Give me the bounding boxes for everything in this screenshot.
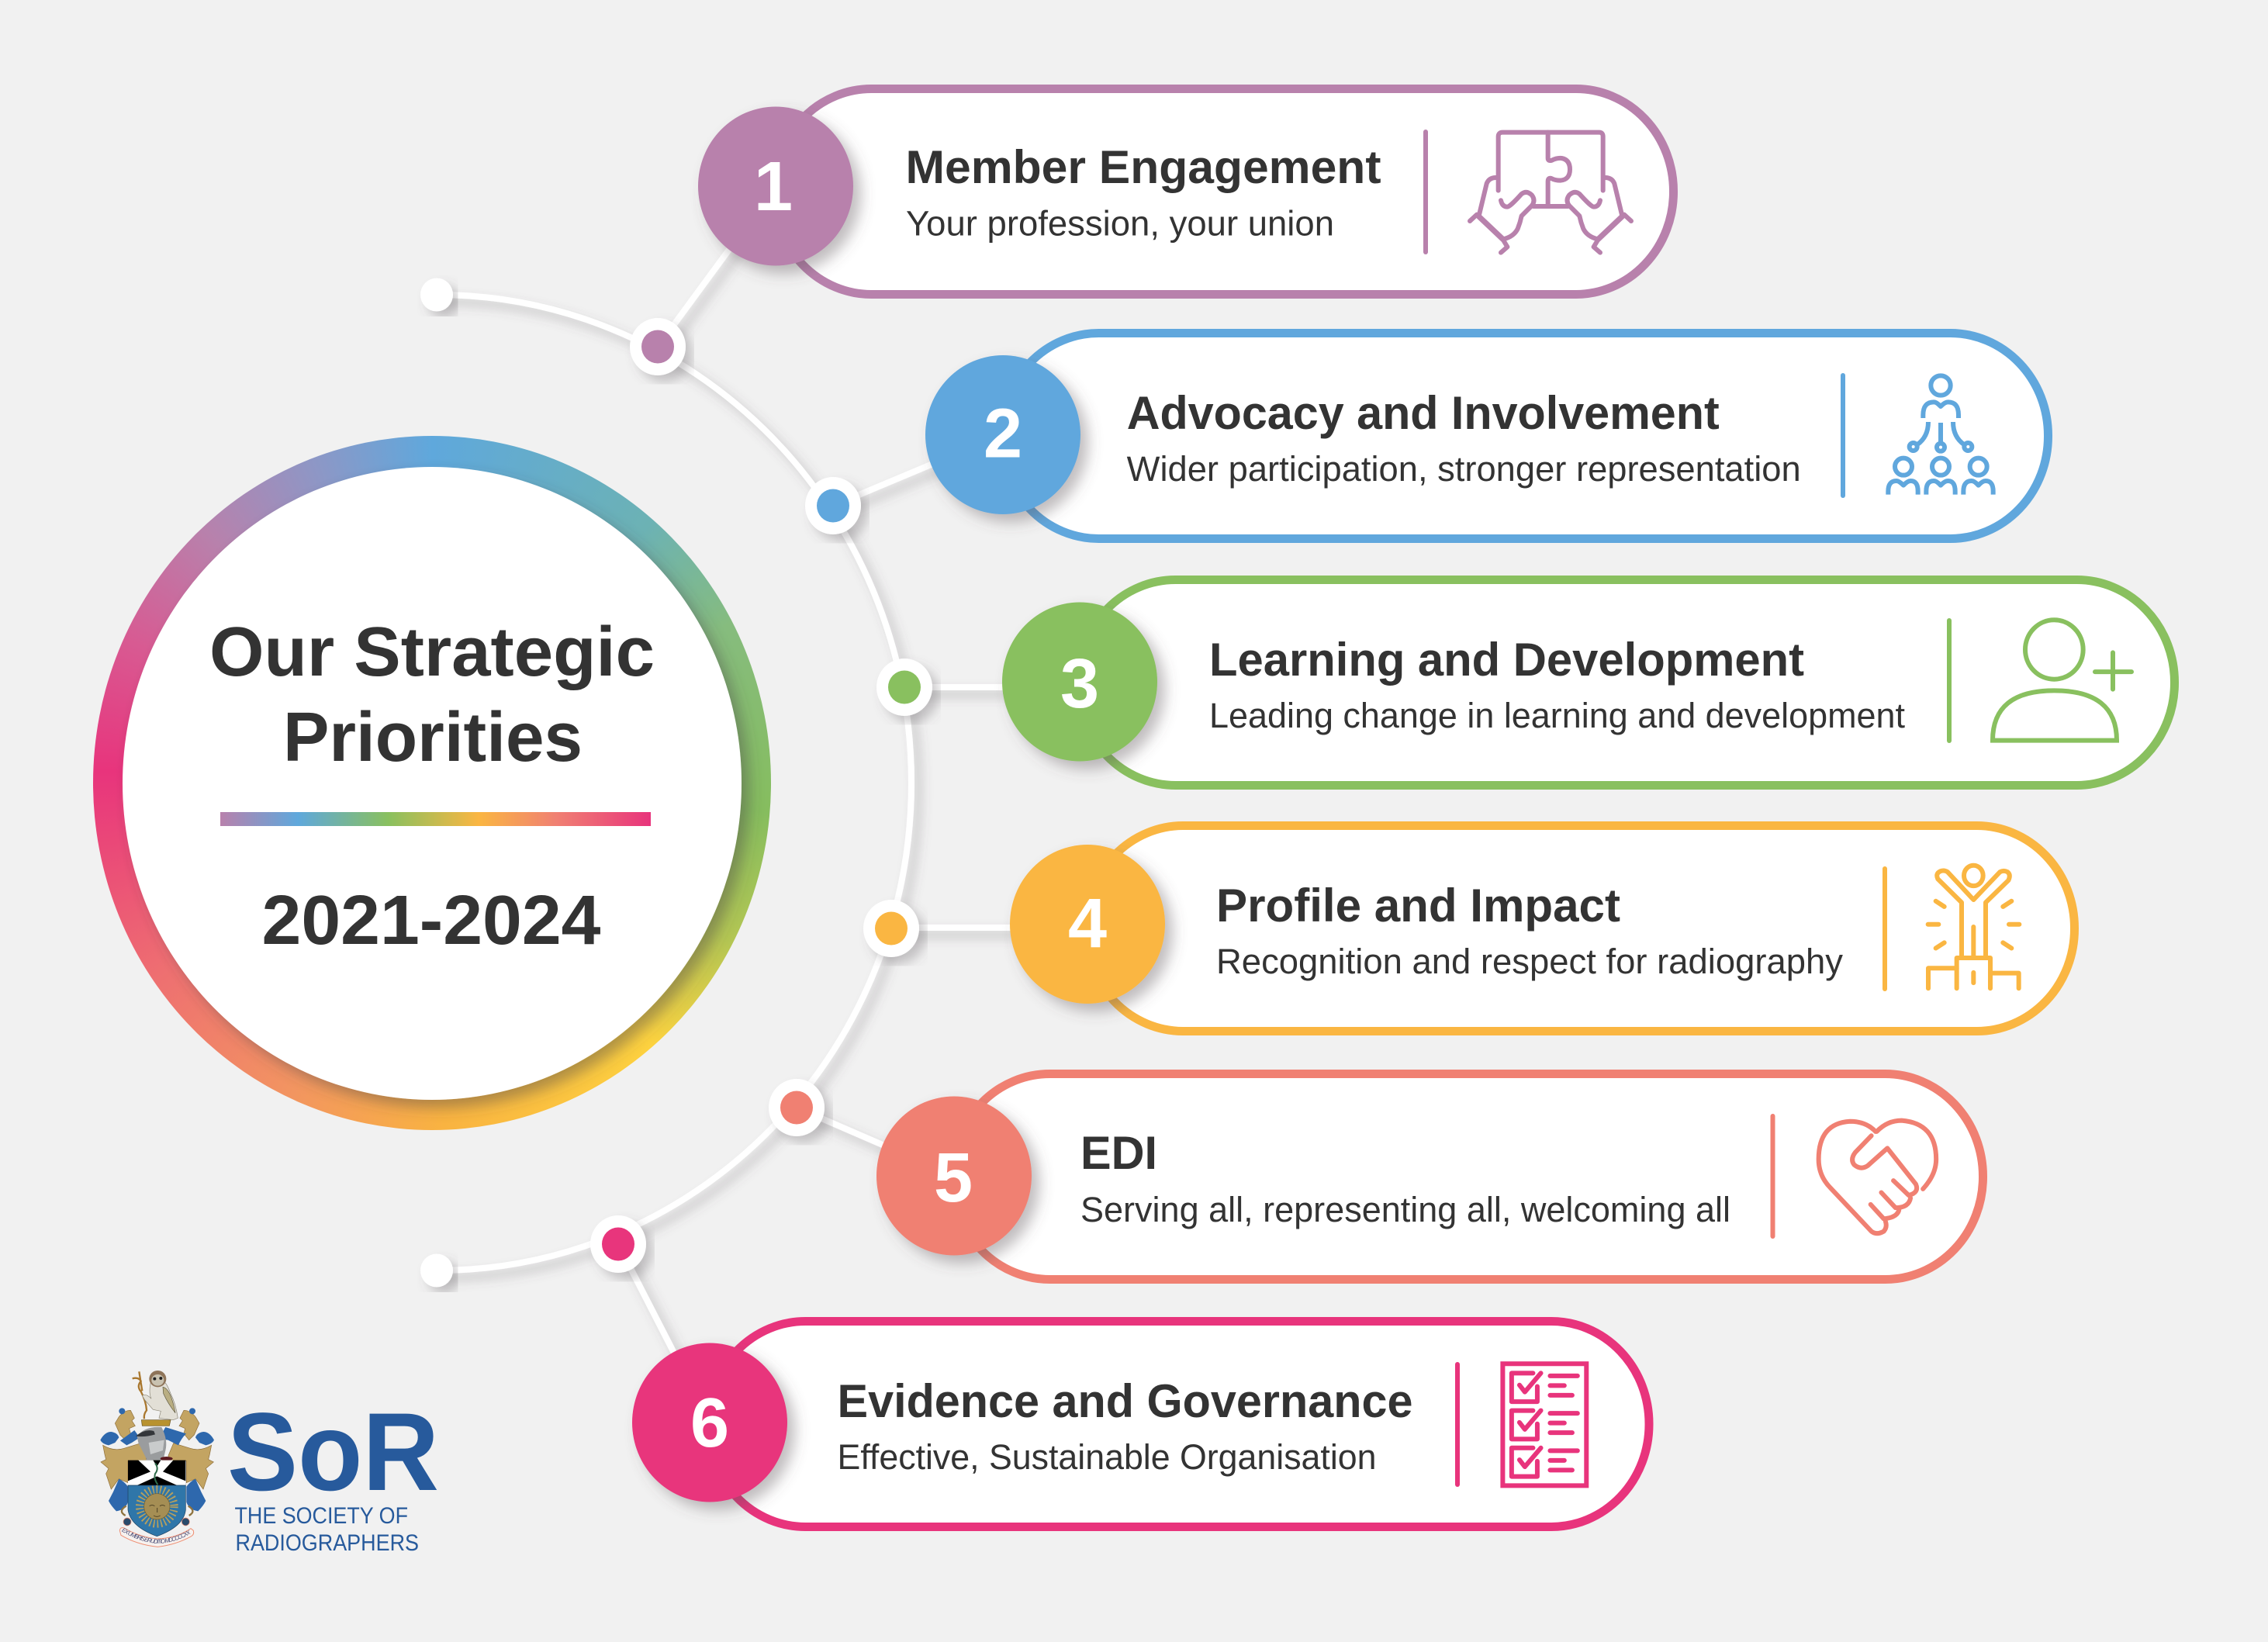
number badge 5: 5 xyxy=(934,1139,973,1217)
subtitle: Effective, Sustainable Organisation xyxy=(838,1437,1376,1477)
staff and serpent xyxy=(133,1371,147,1419)
subtitle: Leading change in learning and development xyxy=(1209,696,1905,735)
blue wreath leaf xyxy=(159,1427,186,1445)
title: Advocacy and Involvement xyxy=(1127,387,1720,439)
subtitle: Your profession, your union xyxy=(906,203,1334,244)
society name: THE SOCIETY OF xyxy=(234,1503,408,1529)
rainbow divider xyxy=(220,812,651,826)
title: Member Engagement xyxy=(906,141,1381,193)
number badge 1: 1 xyxy=(754,148,793,226)
node 2 xyxy=(805,477,861,534)
number badge 1 xyxy=(698,107,853,265)
panel: priority 1 Member Engagement xyxy=(698,88,1674,295)
panel: priority 5 EDI xyxy=(876,1073,1983,1280)
number badge 3: 3 xyxy=(1060,645,1099,723)
timeline end dot xyxy=(420,1253,453,1288)
timeline start dot xyxy=(420,278,453,312)
icon: group hierarchy xyxy=(1888,375,1993,495)
heading xyxy=(209,614,655,776)
society name: RADIOGRAPHERS xyxy=(236,1530,419,1556)
node 5 xyxy=(769,1079,825,1136)
number badge 4 xyxy=(1010,845,1165,1004)
node 4 xyxy=(863,900,919,957)
shield base with sun xyxy=(128,1485,185,1537)
motto scroll: EX UMBRIS ERUDITIO MDCCCCXX xyxy=(121,1528,191,1543)
heading: Priorities xyxy=(283,699,583,776)
subtitle: Serving all, representing all, welcoming all xyxy=(1080,1190,1730,1229)
pill outline xyxy=(707,1322,1649,1526)
divider xyxy=(1423,130,1428,254)
icon: person on podium xyxy=(1928,866,2019,988)
title: EDI xyxy=(1080,1127,1157,1179)
panel: priority 2 Advocacy and Involvement xyxy=(925,334,2048,538)
subtitle: Recognition and respect for radiography xyxy=(1216,942,1843,981)
left mantling xyxy=(100,1408,146,1516)
icon: handshake heart xyxy=(1819,1121,1936,1233)
gradient ring xyxy=(93,436,771,1130)
owl xyxy=(142,1371,178,1420)
pill outline xyxy=(774,88,1674,295)
title: Evidence and Governance xyxy=(838,1375,1413,1427)
divider xyxy=(1841,373,1845,498)
pill outline xyxy=(952,1073,1983,1280)
node 1 xyxy=(630,318,686,375)
timeline: curved connector and branches xyxy=(437,186,1087,1422)
motto scroll xyxy=(119,1517,194,1547)
number badge 2 xyxy=(925,355,1080,514)
white disc xyxy=(123,467,742,1100)
right mantling xyxy=(168,1408,214,1516)
divider xyxy=(1883,866,1887,991)
icon: hands holding puzzle xyxy=(1470,133,1631,253)
node 3 xyxy=(876,659,932,716)
icon: person add xyxy=(1993,620,2131,741)
number badge 2: 2 xyxy=(984,396,1022,473)
panel: priority 3 Learning and Development xyxy=(1002,580,2175,785)
number badge 6: 6 xyxy=(690,1384,729,1462)
heading: Our Strategic xyxy=(209,614,655,691)
icon: checklist xyxy=(1502,1364,1586,1485)
node 6 xyxy=(590,1215,646,1273)
crest xyxy=(100,1371,214,1547)
title: Profile and Impact xyxy=(1216,880,1620,932)
helmet xyxy=(136,1427,173,1466)
title: Learning and Development xyxy=(1209,634,1804,686)
wreath xyxy=(141,1420,171,1426)
SoR wordmark: SoR xyxy=(227,1391,439,1514)
number badge 6 xyxy=(632,1343,787,1502)
divider xyxy=(1947,618,1952,743)
pill outline xyxy=(1086,825,2074,1032)
panel: central title circle xyxy=(93,436,771,1130)
subtitle: Wider participation, stronger representation xyxy=(1127,449,1801,489)
divider xyxy=(1455,1362,1460,1487)
society name xyxy=(234,1503,419,1556)
pill outline xyxy=(1078,580,2175,785)
panel: priority 6 Evidence and Governance xyxy=(632,1322,1649,1526)
number badge 3 xyxy=(1002,602,1157,762)
panel: priority 4 Profile and Impact xyxy=(1010,825,2074,1032)
number badge 5 xyxy=(876,1097,1032,1255)
shield chief xyxy=(128,1461,185,1485)
divider xyxy=(1770,1114,1775,1239)
pill outline xyxy=(1001,334,2048,538)
number badge 4: 4 xyxy=(1068,885,1107,963)
years: 2021-2024 xyxy=(262,882,600,959)
logo: Society of Radiographers xyxy=(100,1371,439,1556)
